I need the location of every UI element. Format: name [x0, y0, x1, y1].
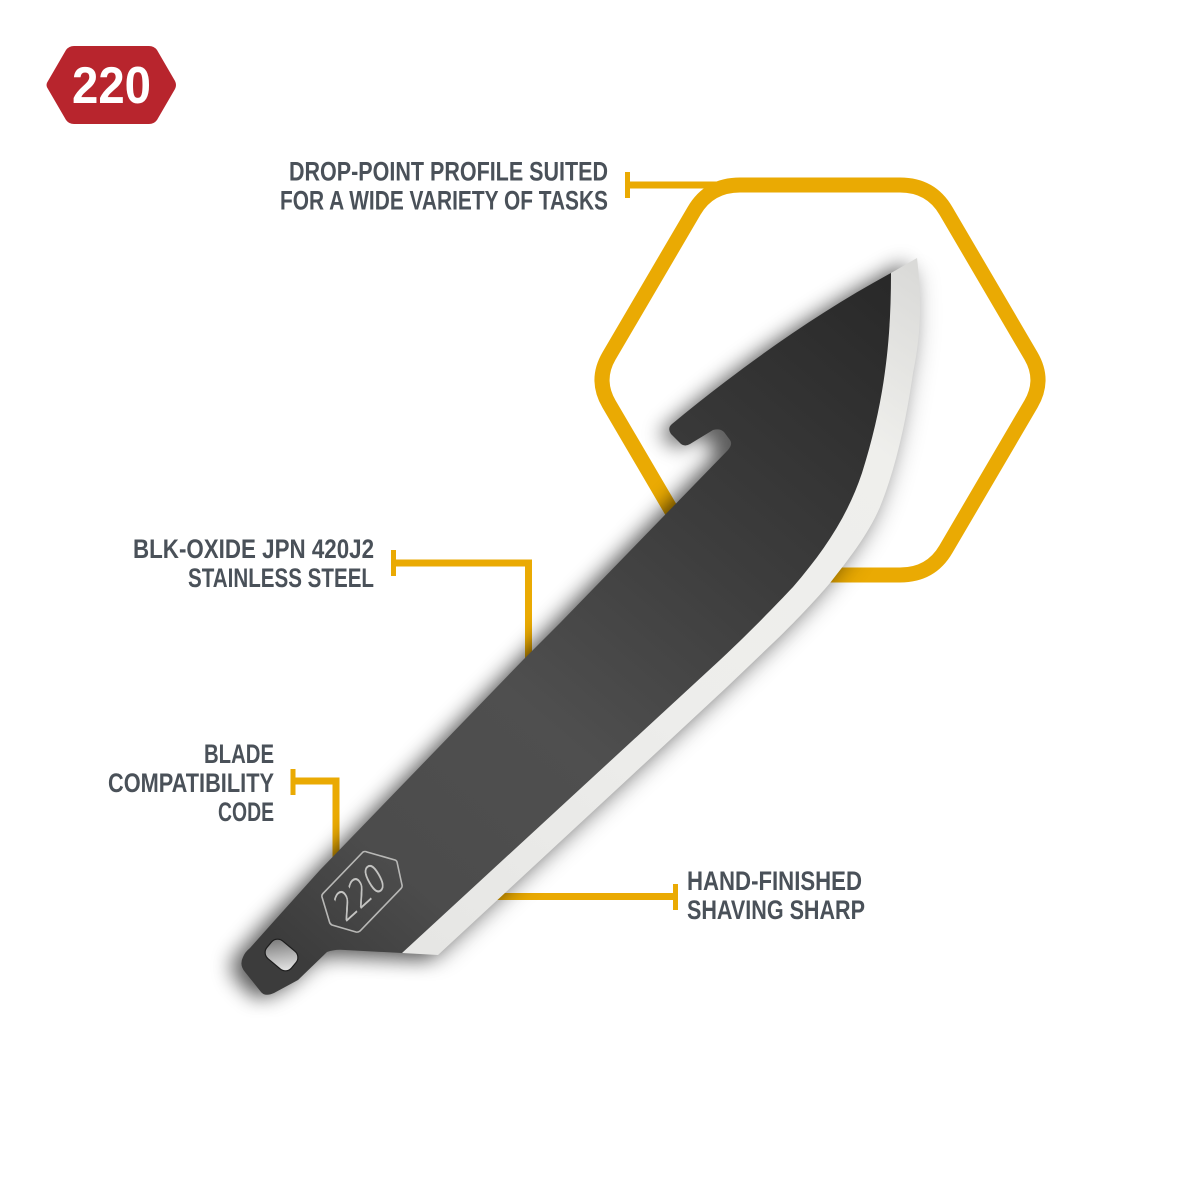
badge: 220 compatibility code: [46, 46, 176, 124]
label: steel: [133, 534, 374, 593]
etched 220 mark: 220: [327, 853, 393, 931]
label: compatibility code: BLADE: [204, 739, 274, 769]
lanyard hole: [262, 936, 301, 974]
leader: drop-point profile: [628, 172, 725, 198]
blade: [241, 258, 920, 995]
leader: compatibility code: [293, 769, 336, 860]
label: compatibility code: COMPATIBILITY: [108, 768, 274, 798]
label: hand-finished: SHAVING SHARP: [687, 895, 865, 925]
hexagon outline: drop-point profile frame: [602, 185, 1038, 575]
label: steel: STAINLESS STEEL: [188, 563, 374, 593]
leader: hand-finished edge: [490, 884, 676, 910]
label: hand-finished: [687, 866, 865, 925]
badge: 220 compatibility code: 220: [72, 57, 151, 115]
label: steel: BLK-OXIDE JPN 420J2: [133, 534, 374, 564]
label: compatibility code: CODE: [218, 797, 274, 827]
black oxide body: [241, 273, 891, 995]
silver cutting edge: [402, 258, 920, 955]
label: drop-point profile: FOR A WIDE VARIETY OF TASKS: [280, 186, 608, 216]
label: compatibility code: [108, 739, 274, 827]
label: drop-point profile: DROP-POINT PROFILE SUITED: [289, 156, 608, 186]
label: drop-point profile: [280, 156, 608, 216]
blade shadow: [231, 262, 924, 1003]
leader: blk-oxide steel: [394, 550, 528, 665]
label: hand-finished: HAND-FINISHED: [687, 866, 862, 896]
